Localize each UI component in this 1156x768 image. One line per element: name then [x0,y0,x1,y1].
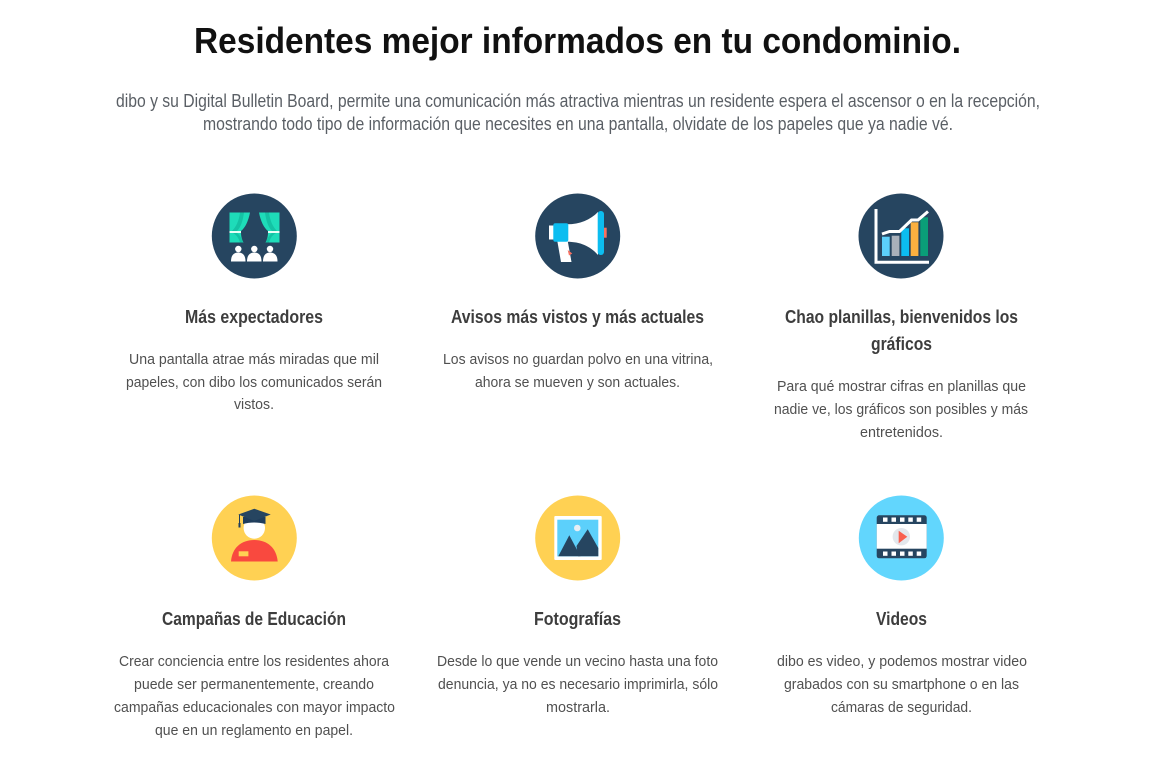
intro paragraph: mostrando todo tipo de información que necesites en una pantalla, olvidate de los papeles que ya nadie vé. [203,114,953,134]
body text: dibo es video, y podemos mostrar video [777,653,1027,670]
icon: bar chart with trend line [858,194,944,278]
panel: gráficos [774,194,1028,441]
body text: ahora se mueven y son actuales. [475,374,680,391]
body text: Para qué mostrar cifras en planillas que [777,378,1026,395]
body text: papeles, con dibo los comunicados serán [126,374,382,391]
intro paragraph: dibo y su Digital Bulletin Board, permite una comunicación más atractiva mientras un residente espera el ascensor o en la recepción, [116,91,1040,111]
body text [437,653,718,716]
heading: Más expectadores [185,307,323,327]
body text [777,653,1027,716]
heading: Fotografías [534,609,621,629]
body text: Los avisos no guardan polvo en una vitrina, [443,351,713,368]
body text: entretenidos. [860,424,943,441]
body text [126,351,382,413]
body text: Una pantalla atrae más miradas que mil [129,351,379,368]
panel: videos [777,496,1027,716]
body text: vistos. [234,396,274,413]
icon: theatre curtains and audience [212,194,297,278]
body text: campañas educacionales con mayor impacto [114,699,395,716]
body text: puede ser permanentemente, creando [134,676,374,693]
body text: denuncia, ya no es necesario imprimirla, sólo [438,676,718,693]
panel: avisos [443,194,713,391]
panel: fotografías [437,496,718,716]
body text: que en un reglamento en papel. [155,722,353,739]
body text [774,378,1028,441]
body text: Desde lo que vende un vecino hasta una foto [437,653,718,670]
body text [114,653,395,739]
body text: cámaras de seguridad. [831,699,972,716]
icon: picture [535,496,620,580]
body text: Crear conciencia entre los residentes ahora [119,653,390,670]
body text [443,351,713,391]
heading: Campañas de Educación [162,609,346,629]
heading: Avisos más vistos y más actuales [451,307,704,327]
icon: megaphone [535,194,620,278]
body text: mostrarla. [546,699,610,716]
body text: grabados con su smartphone o en las [784,676,1019,693]
heading: Chao planillas, bienvenidos los [785,307,1018,327]
intro paragraph [116,91,1040,134]
body text: nadie ve, los gráficos son posibles y más [774,401,1028,418]
heading [785,307,1018,354]
heading: Videos [876,609,927,629]
title: Residentes mejor informados en tu condominio. [194,20,961,61]
heading: gráficos [871,334,932,354]
icon: film strip with play button [859,496,944,580]
icon: graduate [212,496,297,580]
panel: más expectadores [126,194,382,413]
panel: educación [114,496,395,739]
